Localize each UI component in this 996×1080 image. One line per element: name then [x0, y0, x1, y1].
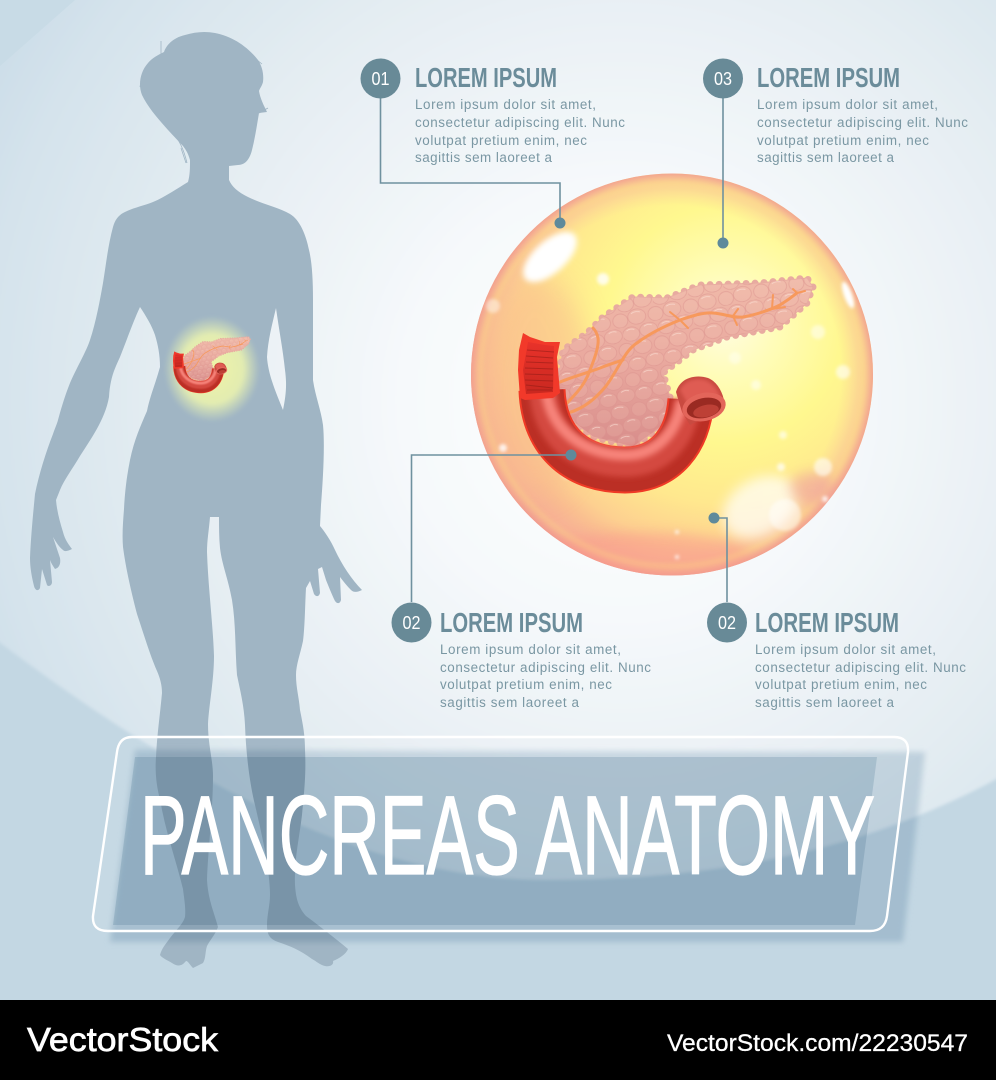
callout 02 left: 02	[402, 613, 420, 633]
callout 02 right: Lorem ipsum dolor sit amet,	[755, 642, 936, 657]
sphere with pancreas	[471, 174, 873, 577]
watermark bar: VectorStock.com/22230547	[667, 1030, 968, 1057]
watermark bar: VectorStock	[27, 1021, 219, 1058]
callout 01: volutpat pretium enim, nec	[415, 133, 587, 148]
callout 02 right: sagittis sem laoreet a	[755, 695, 895, 710]
callout 03: volutpat pretium enim, nec	[757, 133, 929, 148]
silhouette: woman	[30, 32, 362, 968]
callout 02 left: sagittis sem laoreet a	[440, 695, 580, 710]
callout 03	[703, 58, 968, 248]
callout 01: Lorem ipsum dolor sit amet,	[415, 97, 596, 112]
callout 03: 03	[714, 69, 732, 89]
callout 03: LOREM IPSUM	[757, 62, 900, 93]
callout 03: Lorem ipsum dolor sit amet,	[757, 97, 938, 112]
callout 02 left: Lorem ipsum dolor sit amet,	[440, 642, 621, 657]
small pancreas in body	[173, 337, 250, 387]
callout 02 right	[707, 512, 966, 710]
callout 02 left	[392, 450, 651, 710]
callout 02 right: consectetur adipiscing elit. Nunc	[755, 660, 966, 675]
glass panel outline	[93, 737, 908, 931]
callout 02 left: consectetur adipiscing elit. Nunc	[440, 660, 651, 675]
callout 02 right: volutpat pretium enim, nec	[755, 677, 927, 692]
callout 02 right: LOREM IPSUM	[755, 607, 899, 638]
callout 02 left: LOREM IPSUM	[440, 607, 583, 638]
callout 03: consectetur adipiscing elit. Nunc	[757, 115, 968, 130]
callout 01: LOREM IPSUM	[415, 62, 557, 93]
callout 02 right: 02	[718, 613, 736, 633]
callout 01: 01	[372, 69, 390, 89]
callout 03: sagittis sem laoreet a	[757, 150, 895, 165]
large pancreas and duodenum	[518, 278, 813, 470]
callout 01: sagittis sem laoreet a	[415, 150, 553, 165]
callout 01	[360, 58, 625, 228]
callout 01: consectetur adipiscing elit. Nunc	[415, 115, 625, 130]
panel shadow	[110, 750, 925, 942]
watermark bar	[0, 1000, 996, 1080]
silhouette organ glow	[164, 316, 260, 422]
glass panel fill	[113, 757, 877, 925]
callout 02 left: volutpat pretium enim, nec	[440, 677, 612, 692]
